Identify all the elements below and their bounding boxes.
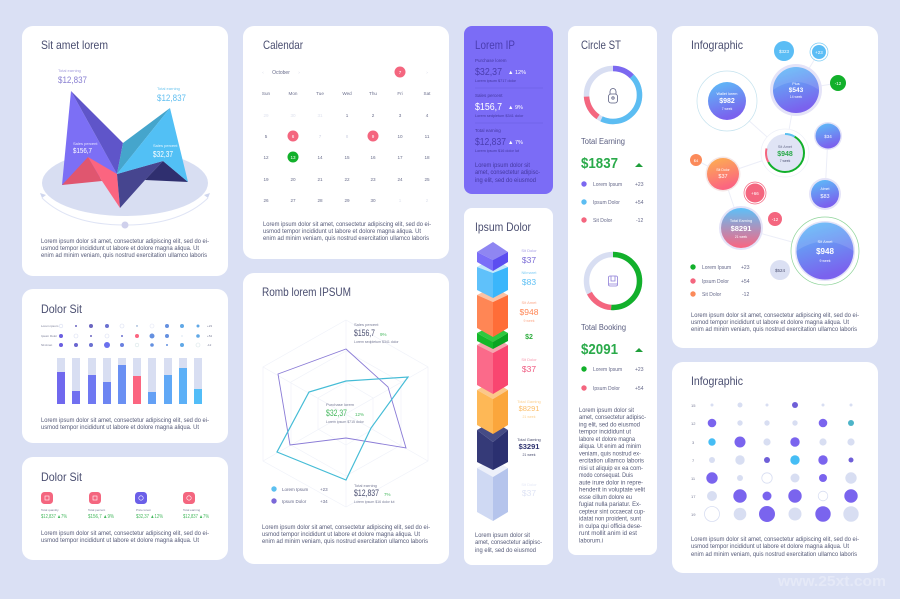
bubble network: 7 week (722, 107, 733, 111)
icon stats: $156,7 ▲9% (88, 514, 114, 520)
purple stats: Sales percent (475, 93, 503, 98)
body text: tempor incididunt ut (579, 428, 631, 436)
booking legend: Ipsum Dolor (593, 386, 620, 392)
radar labels (326, 322, 399, 504)
panel: dolor sit icons: Lorem ipsum dolor sit amet, consectetur adipiscing elit, sed do ei- (41, 530, 209, 537)
bubble network: 14 week (790, 95, 802, 99)
panel: lorem ip: Lorem ipsum dolor sit (475, 162, 530, 169)
panel: sit amet lorem: Sit amet lorem (41, 38, 108, 52)
calendar grid: 25 (424, 177, 430, 182)
panel: romb lorem ipsum: Lorem ipsum dolor sit amet, consectetur adipiscing elit, sed do ei- (262, 524, 430, 531)
dot matrix: Lorem ipsum (41, 324, 59, 328)
booking legend (581, 366, 644, 392)
calendar grid: 11 (425, 134, 430, 139)
panel: dolor sit bars: Dolor Sit (41, 302, 83, 316)
stack labels: $83 (522, 277, 536, 287)
body text: Lorem ipsum dolor sit (579, 407, 634, 414)
dot grid: 7 (692, 458, 695, 463)
stack labels: $8291 (519, 404, 539, 413)
calendar grid (262, 66, 431, 203)
body text: aute irure dolor in repre- (579, 480, 643, 486)
dot grid: 3 (692, 440, 695, 445)
radar legend (271, 486, 328, 504)
panel: infographic bubbles: Lorem ipsum dolor sit amet, consectetur adipiscing elit, sed do ei- (691, 312, 859, 319)
panel: dolor sit icons: usmod tempor incididunt ut labore et dolore magna aliqua. Ut (41, 537, 199, 544)
bubble network: $4 (694, 158, 699, 163)
chart labels: $156,7 (73, 146, 92, 155)
calendar grid: 21 (317, 177, 323, 182)
3d chart (40, 91, 210, 228)
stack labels: Total Gaming (517, 399, 541, 404)
body text: in culpa qui officia dese- (579, 523, 642, 530)
stack labels: 21 week (522, 415, 536, 419)
earning legend: Ipsum Dolor (593, 200, 620, 206)
body text: ing elit, sed do eiusmod (579, 422, 640, 428)
radar labels: Sales percent (354, 322, 379, 327)
chart labels: Sales percent (153, 143, 178, 148)
bubble network: +66 (751, 191, 759, 196)
body text: modo consequat. Duis (579, 472, 634, 479)
stack labels: $3291 (519, 442, 539, 451)
calendar grid: 30 (370, 198, 376, 203)
panel: dolor sit bars: Lorem ipsum dolor sit amet, consectetur adipiscing elit, sed do ei- (41, 417, 209, 424)
calendar grid: 9 (372, 134, 375, 139)
body text: henderit in voluptate velit (579, 486, 645, 494)
calendar grid: 17 (397, 155, 403, 160)
panel: circle st: Total Booking (581, 323, 626, 332)
dot matrix (41, 324, 212, 348)
stack labels: $37 (522, 488, 536, 498)
dot matrix: Ipsum Dolor (41, 334, 57, 338)
purple stats: Lorem ipsum $717 dolor (475, 79, 517, 83)
calendar grid: 29 (344, 198, 350, 203)
calendar grid: 24 (397, 177, 403, 182)
chart labels: $32,37 (153, 150, 173, 159)
calendar grid: Sun (262, 91, 271, 96)
radar legend: Ipsum Dolor (282, 499, 307, 504)
panel: infographic dot matrix (672, 362, 878, 573)
purple stats: Lorem ipsum $16 dolor lut (475, 149, 520, 153)
dot grid: 11 (691, 476, 696, 481)
booking legend: Lorem Ipsum (593, 367, 622, 373)
bubble network: $8291 (731, 224, 751, 233)
panel: ipsum dolor stack: Lorem ipsum dolor sit (475, 532, 530, 539)
bubble network: $83 (820, 194, 830, 200)
panel: lorem ip: amet, consectetur adipisc- (475, 169, 540, 176)
icon stats: Price lorem (136, 508, 152, 512)
body text: esse cillum dolore eu (579, 494, 632, 501)
bubble network: $982 (719, 98, 735, 105)
body text: idatat non proident, sunt (579, 516, 641, 522)
bubble network: $34 (824, 134, 832, 139)
bar chart (57, 358, 202, 404)
radar labels: Purchase lorem (326, 402, 355, 407)
bubble connectors (696, 52, 838, 251)
bubble network: +23 (815, 50, 823, 55)
panel: infographic dot matrix: usmod tempor incididunt ut labore et dolore magna aliqua. Ut (691, 543, 849, 550)
calendar grid: 23 (370, 177, 376, 182)
body text: fugiat nulla pariatur. Ex- (579, 501, 641, 508)
panel: sit amet lorem (22, 26, 228, 276)
bubble network: 9 week (819, 259, 831, 263)
dot grid: 15 (691, 403, 696, 408)
icon: book (608, 276, 618, 286)
panel: infographic dot matrix: Lorem ipsum dolor sit amet, consectetur adipiscing elit, sed do ei- (691, 536, 859, 543)
panel: infographic bubbles: enim ad minim veniam, quis nostrud exercitation ullamco laboris (691, 326, 858, 333)
icon: up arrow (635, 163, 643, 167)
calendar grid: Thu (369, 91, 377, 96)
calendar grid: Fri (397, 91, 403, 96)
panel: dolor sit icons: Dolor Sit (41, 470, 83, 484)
bubble network: $323 (779, 49, 790, 54)
body text: veniam, quis nostrud ex- (579, 450, 641, 458)
radar labels: Lorem ipsum $715 dolor (326, 420, 365, 424)
panel: calendar: enim ad minim veniam, quis nostrud exercitation ullamco laboris (263, 235, 430, 242)
calendar grid: 7 (319, 134, 322, 139)
icon stats: $32,37 ▲12% (136, 514, 163, 520)
bubble legend: Lorem Ipsum (702, 265, 731, 271)
panel: dolor sit bars: usmod tempor incididunt ut labore et dolore magna aliqua. Ut (41, 424, 199, 431)
calendar grid: 18 (424, 155, 430, 160)
panel: romb lorem ipsum: Romb lorem IPSUM (262, 285, 351, 299)
earning legend: Lorem Ipsum (593, 182, 622, 188)
calendar grid: 5 (265, 134, 268, 139)
dot matrix: +23 (207, 324, 212, 328)
calendar grid: 3 (399, 113, 402, 118)
isometric stack (477, 242, 508, 521)
stack labels: 9 week (523, 319, 535, 323)
icon stats: $12,837 ▲7% (183, 514, 209, 520)
stack labels: $2 (525, 334, 533, 341)
calendar grid: 12 (263, 155, 269, 160)
calendar grid: 2 (372, 113, 375, 118)
calendar grid: 14 (317, 155, 323, 160)
bubble legend: +23 (741, 265, 750, 271)
calendar grid: 22 (344, 177, 350, 182)
stack labels (517, 248, 541, 498)
panel: ipsum dolor stack: Ipsum Dolor (475, 220, 531, 234)
body text: labore et dolore magna (579, 436, 635, 443)
panel: sit amet lorem: enim ad minim veniam, quis nostrud exercitation ullamco laboris (41, 252, 208, 259)
calendar grid: 1 (399, 198, 402, 203)
calendar grid: Wed (342, 91, 352, 96)
calendar grid: 15 (344, 155, 350, 160)
stack labels: $37 (522, 364, 536, 374)
dot matrix: -12 (207, 343, 212, 347)
panel: dolor sit bars (22, 289, 228, 443)
calendar grid: 20 (290, 177, 296, 182)
panel: circle st: Total Earning (581, 137, 625, 146)
calendar grid: 7 (399, 70, 402, 75)
panel: sit amet lorem: Lorem ipsum dolor sit amet, consectetur adipiscing elit, sed do ei- (41, 238, 209, 245)
panel: lorem ip (464, 26, 553, 194)
panel: ipsum dolor stack: amet, consectetur adipisc- (475, 539, 542, 546)
chart labels: Total earning (157, 86, 180, 91)
body text: laborum.i (579, 538, 603, 544)
bubble network: $37 (718, 174, 728, 180)
bubble network (690, 41, 859, 285)
chart labels: Sales percent (73, 141, 98, 146)
panel: dolor sit icons (22, 457, 228, 560)
radar labels: 12% (355, 412, 364, 417)
panel: infographic dot matrix: enim ad minim veniam, quis nostrud exercitation ullamco laboris (691, 551, 858, 558)
body text: nisi ut aliquip ex ea com- (579, 465, 643, 472)
bubble network: Sit Amet (778, 145, 793, 149)
calendar grid: 31 (317, 113, 323, 118)
panel: infographic bubbles (672, 26, 878, 348)
panel: romb lorem ipsum (243, 273, 449, 564)
body text: ercitation ullamco laboris (579, 458, 645, 464)
body text: amet, consectetur adipisc- (579, 414, 646, 421)
chart labels: $12,837 (157, 93, 186, 103)
calendar grid: 1 (346, 113, 349, 118)
icon stats: $12,837 ▲7% (41, 514, 67, 520)
calendar grid: 27 (290, 198, 296, 203)
bubble network: Total Earning (730, 219, 752, 223)
calendar grid: 13 (290, 155, 296, 160)
bubble network: -12 (772, 217, 779, 222)
bubble network: $543 (789, 87, 804, 94)
icon stats (41, 492, 209, 520)
panel: ipsum dolor stack (464, 208, 553, 565)
radar labels: $156,7 (354, 328, 375, 338)
panel: circle st: $2091 (581, 341, 618, 358)
radar labels: 9% (380, 332, 387, 337)
bubble network: $948 (777, 151, 793, 158)
panel: calendar: usmod tempor incididunt ut labore et dolore magna aliqua. Ut (263, 228, 421, 235)
donut: total earning (586, 68, 640, 122)
panel: romb lorem ipsum: enim ad minim veniam, quis nostrud exercitation ullamco laboris (262, 538, 429, 545)
purple stats: ▲ 9% (508, 105, 523, 111)
panel: lorem ip: ing elit, sed do eiusmod (475, 177, 536, 184)
calendar grid: 10 (397, 134, 403, 139)
bubble network: 7 week (780, 159, 791, 163)
panel: infographic bubbles: Infographic (691, 38, 743, 52)
bubble network: Wallet lorem (717, 92, 737, 96)
dot matrix: Sit Amet (41, 343, 52, 347)
body text: aliqua. Ut enim ad minim (579, 443, 641, 450)
calendar grid: 2 (426, 198, 429, 203)
dot grid: 19 (691, 512, 696, 517)
bubble network: 21 week (735, 235, 747, 239)
bubble network: Sit Amet (818, 239, 833, 244)
purple stats: $156,7 (475, 102, 502, 113)
purple stats: Lorem sedpletum $341 dolor (475, 114, 524, 118)
dot grid: 17 (691, 494, 696, 499)
stack labels: Total Gaming (517, 437, 541, 442)
icon stats: Total earning (183, 508, 201, 512)
stack labels: $37 (522, 255, 536, 265)
icon: up arrow (635, 348, 643, 352)
chart labels: Total earning (58, 68, 81, 73)
body text: cepteur sint occaecat cup- (579, 508, 645, 516)
bubble network: $948 (816, 247, 834, 256)
radar labels: Lorem sedpletum $341 dolor (354, 340, 399, 344)
stack labels: 21 week (522, 453, 536, 457)
stack labels: Nilmaret (522, 270, 537, 275)
earning legend: Sit Dolor (593, 218, 613, 224)
icon stats: Total percent (88, 508, 105, 512)
stack labels: Sit Dolor (521, 248, 537, 253)
body text (579, 407, 646, 544)
radar legend: +34 (320, 499, 328, 504)
radar legend: +23 (320, 487, 328, 492)
stack labels: Sit Dolor (521, 482, 537, 487)
watermark: www.25xt.com (777, 573, 886, 590)
booking legend: +54 (635, 386, 644, 392)
dot grid (691, 402, 859, 522)
panel: calendar (243, 26, 449, 259)
purple stats: Purchase lorem (475, 58, 507, 63)
panel: circle st: $1837 (581, 155, 618, 172)
panel: circle st: Circle ST (581, 38, 622, 52)
earning legend: +23 (635, 182, 644, 188)
purple stats: Total earning (475, 128, 501, 133)
calendar grid: 16 (370, 155, 376, 160)
calendar grid: 26 (263, 198, 269, 203)
calendar grid: October (272, 70, 290, 76)
purple stats (475, 58, 526, 153)
bubble network: Sit Dolor (716, 168, 731, 172)
panel: infographic bubbles: usmod tempor incididunt ut labore et dolore magna aliqua. Ut (691, 319, 849, 326)
earning legend: -12 (636, 218, 643, 224)
bubble legend (690, 264, 750, 298)
radar labels: 7% (384, 492, 391, 497)
stack labels: $948 (520, 307, 539, 317)
donut: total booking (586, 254, 640, 308)
stack labels: Sit Dolor (521, 357, 537, 362)
bubble legend: Sit Dolor (702, 292, 722, 298)
earning legend: +54 (635, 200, 644, 206)
bubble network: Plus (792, 82, 800, 86)
bubble network: Almet (821, 187, 829, 191)
calendar grid: 6 (292, 134, 295, 139)
purple stats: $32,37 (475, 67, 502, 78)
calendar grid: Mon (289, 91, 298, 96)
bubble network: -12 (835, 81, 842, 86)
panel: infographic dot matrix: Infographic (691, 374, 743, 388)
radar labels: $12,837 (354, 488, 379, 498)
radar labels: Total earning (354, 483, 377, 488)
bubble legend: Ipsum Dolor (702, 279, 729, 285)
radar labels: $32,37 (326, 408, 347, 418)
dot grid: 12 (691, 421, 696, 426)
radar legend: Lorem Ipsum (282, 487, 309, 492)
calendar grid: Tue (316, 91, 324, 96)
calendar grid: 19 (263, 177, 269, 182)
panel: calendar: Lorem ipsum dolor sit amet, consectetur adipiscing elit, sed do ei- (263, 221, 431, 228)
panel: calendar: Calendar (263, 38, 303, 52)
radar chart (263, 320, 428, 507)
calendar grid: ‹ (262, 70, 264, 75)
calendar grid: › (298, 70, 300, 75)
calendar grid: › (426, 70, 428, 75)
earning legend (581, 181, 644, 224)
icon stats: Total quantity (41, 508, 59, 512)
radar labels: Lorem ipsum $16 dolor lut (354, 500, 394, 504)
calendar grid: 28 (317, 198, 323, 203)
bubble legend: +54 (741, 279, 750, 285)
panel: romb lorem ipsum: usmod tempor incididunt ut labore et dolore magna aliqua. Ut (262, 531, 420, 538)
bubble network: $524 (775, 268, 786, 273)
calendar grid: 4 (426, 113, 429, 118)
purple stats: ▲ 12% (508, 70, 526, 76)
stack labels: Sit Amet (522, 300, 537, 305)
panel: sit amet lorem: usmod tempor incididunt ut labore et dolore magna aliqua. Ut (41, 245, 199, 252)
booking legend: +23 (635, 367, 644, 373)
purple stats: ▲ 7% (508, 140, 523, 146)
calendar grid: 30 (290, 113, 296, 118)
calendar grid: Sat (424, 91, 431, 96)
icon: lock (608, 88, 618, 103)
panel: circle st (568, 26, 657, 555)
dot matrix: +54 (207, 334, 212, 338)
body text: runt mollit anim id est (579, 530, 637, 537)
bubble legend: -12 (742, 292, 749, 298)
panel: ipsum dolor stack: ing elit, sed do eiusmod (475, 547, 536, 554)
chart labels: $12,837 (58, 75, 87, 85)
calendar grid: 8 (346, 134, 349, 139)
panel: lorem ip: Lorem IP (475, 40, 515, 52)
purple stats: $12,837 (475, 137, 506, 148)
calendar grid: 29 (263, 113, 269, 118)
chart labels (58, 68, 186, 159)
